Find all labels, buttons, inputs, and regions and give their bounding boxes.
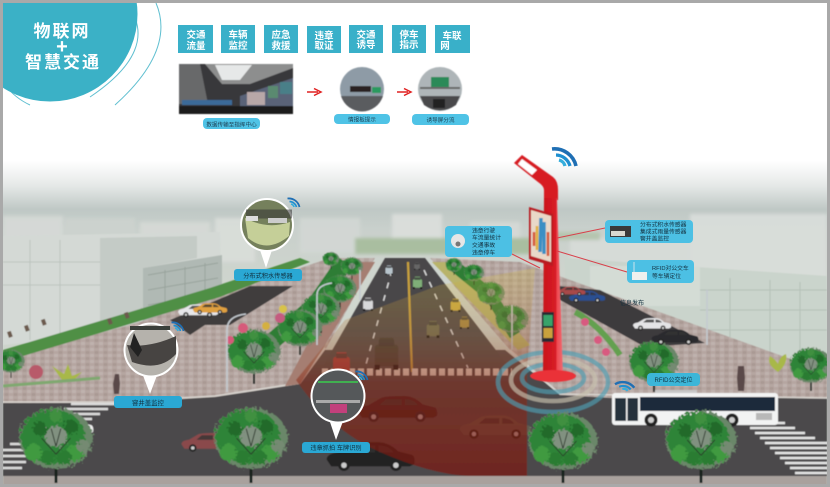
- application tags: 指示: [399, 39, 419, 51]
- application tags: 应急: [271, 29, 291, 41]
- right plaza paving: [430, 258, 827, 398]
- info board photo: [340, 67, 384, 111]
- left parking lane: [170, 286, 293, 335]
- title circle: 物联网: [34, 22, 90, 41]
- arrow 2: [397, 88, 411, 96]
- callout: RFID: [627, 260, 694, 283]
- title circle: +: [56, 36, 68, 58]
- bus: [612, 390, 778, 426]
- callout: camera functions: 违章停车: [472, 248, 495, 256]
- application tags: 救援: [271, 40, 291, 52]
- pill: RFID bus location: RFID公交定位: [654, 376, 692, 384]
- bottom pavement: [3, 476, 827, 485]
- decorative orbit arcs: [5, 3, 161, 105]
- callout: sensors: [605, 220, 693, 243]
- callout: RFID: RFID对公交车: [652, 264, 689, 272]
- pill: RFID bus location: [647, 373, 700, 386]
- pill: guidance screen: 诱导屏分流: [427, 116, 455, 124]
- distant buildings: [3, 214, 827, 298]
- right foreground buildings: [565, 258, 827, 356]
- application tags: [178, 25, 470, 53]
- left lawn strip and fence: [3, 258, 310, 362]
- pill: info board: [334, 114, 390, 124]
- application tags: 网: [440, 41, 450, 52]
- callout: RFID: 等车辆定位: [652, 272, 681, 280]
- callout: camera functions: [445, 226, 512, 257]
- callout: camera functions: 车流量统计: [472, 234, 501, 242]
- bubble: water sensor: [234, 198, 302, 281]
- application tags: 停车: [399, 29, 419, 41]
- pill: guidance screen: [412, 114, 469, 125]
- planted median left: [226, 252, 375, 386]
- foreground trees: [19, 408, 736, 483]
- pill: data centre: 数据传输至指挥中心: [206, 120, 257, 128]
- bubble: plate recognition: [302, 368, 370, 453]
- arrow 1: [307, 88, 321, 96]
- road markings: [3, 262, 827, 473]
- billboard on pole: [529, 207, 553, 266]
- pill: data centre: [203, 118, 260, 129]
- label: info release: 信息发布: [620, 299, 644, 307]
- right parking lane: [548, 285, 705, 347]
- main road: [318, 258, 515, 375]
- icon: wifi bus: [615, 377, 634, 395]
- cross road: [3, 350, 827, 476]
- application tags: 取证: [314, 40, 334, 52]
- street lamps: [227, 270, 707, 392]
- icon: wifi manhole: [172, 322, 184, 331]
- pill: info board: 情报板提示: [348, 116, 376, 124]
- left foreground buildings: [3, 232, 222, 345]
- icon: wifi plate recognition: [356, 371, 368, 380]
- application tags: 监控: [228, 40, 248, 52]
- kerb lines: [3, 348, 827, 402]
- callout: sensors: 分布式积水传感器: [640, 220, 687, 228]
- application tags: 交通: [356, 29, 376, 41]
- application tags: 车联: [442, 30, 462, 42]
- guidance screen photo: [418, 67, 462, 111]
- kiosk screen on pole: [542, 312, 554, 342]
- callout: sensors: 集成式雨量传感器: [640, 228, 687, 236]
- callout: sensors: 窨井盖监控: [640, 234, 669, 242]
- callout: camera functions: 违章行驶: [472, 226, 495, 234]
- street scene illustration: [0, 214, 830, 485]
- control room photo: [179, 64, 293, 114]
- pedestrians: [113, 366, 745, 394]
- parked and moving cars: [29, 262, 699, 471]
- signal ripples around pole base: [498, 352, 608, 412]
- application tags: 违章: [314, 30, 334, 42]
- application tags: 车辆: [228, 29, 248, 41]
- callout: camera functions: 交通事故: [472, 241, 495, 249]
- title circle: 智慧交通: [25, 52, 101, 72]
- icon: wifi water sensor: [288, 198, 300, 207]
- bubble: water sensor: 分布式积水传感器: [243, 272, 294, 280]
- bubble: plate recognition: 违章抓拍 车牌识别: [310, 444, 362, 452]
- icon: wifi on pole: [552, 149, 576, 166]
- application tags: 诱导: [356, 39, 376, 51]
- bubble: manhole monitor: 窨井盖监控: [132, 398, 165, 407]
- smart pole: [514, 155, 576, 382]
- application tags: 流量: [186, 40, 206, 52]
- connector lines: [512, 228, 627, 272]
- application tags: 交通: [186, 29, 206, 41]
- left plaza paving: [3, 258, 375, 403]
- camera coverage cone: [296, 268, 535, 476]
- title circle: [0, 0, 161, 105]
- planted median right: [0, 258, 830, 392]
- bubble: manhole monitor: [114, 322, 182, 408]
